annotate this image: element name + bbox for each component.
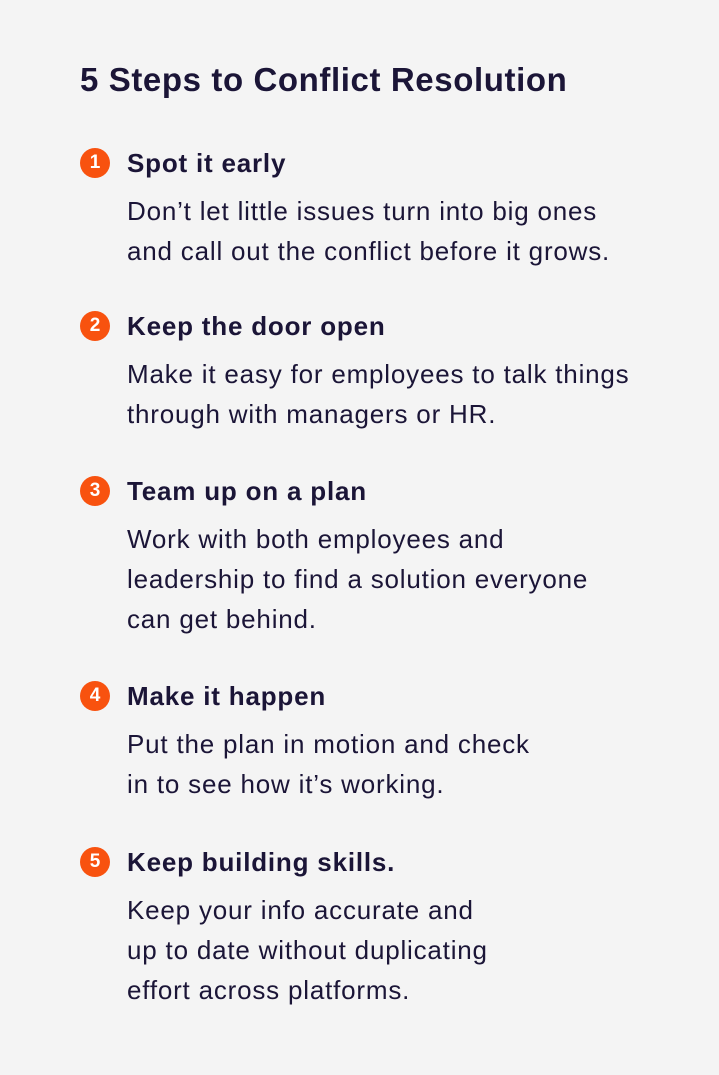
text 1: Don’t let little issues turn into big ones bbox=[127, 196, 597, 226]
icon: number 4: 4 bbox=[90, 685, 100, 706]
text 2: through with managers or HR. bbox=[127, 399, 496, 429]
heading 3: Team up on a plan bbox=[127, 476, 367, 506]
heading 4: Make it happen bbox=[127, 681, 326, 711]
icon: number 5 bbox=[80, 847, 110, 877]
step 3 bbox=[80, 476, 588, 634]
icon: number 3 bbox=[80, 476, 110, 506]
heading 1: Spot it early bbox=[127, 148, 286, 178]
step 2 bbox=[80, 311, 629, 429]
text 5: effort across platforms. bbox=[127, 975, 410, 1005]
step 4 bbox=[80, 681, 530, 799]
title: 5 Steps to Conflict Resolution bbox=[80, 61, 567, 98]
step 1 bbox=[80, 148, 610, 266]
icon: number 1: 1 bbox=[90, 152, 100, 173]
text 3: can get behind. bbox=[127, 604, 317, 634]
icon: number 2: 2 bbox=[90, 315, 100, 336]
text 5: Keep your info accurate and bbox=[127, 895, 474, 925]
text 4: Put the plan in motion and check bbox=[127, 729, 530, 759]
text 3: Work with both employees and bbox=[127, 524, 504, 554]
step 5 bbox=[80, 847, 488, 1005]
text 5: up to date without duplicating bbox=[127, 935, 488, 965]
text 1: and call out the conflict before it grows. bbox=[127, 236, 610, 266]
text 3: leadership to find a solution everyone bbox=[127, 564, 588, 594]
heading 2: Keep the door open bbox=[127, 311, 386, 341]
text 3 bbox=[127, 524, 588, 634]
icon: number 2 bbox=[80, 311, 110, 341]
icon: number 5: 5 bbox=[90, 851, 100, 872]
text 4: in to see how it’s working. bbox=[127, 769, 444, 799]
text 2: Make it easy for employees to talk things bbox=[127, 359, 629, 389]
text 1 bbox=[127, 196, 610, 266]
text 4 bbox=[127, 729, 530, 799]
text 2 bbox=[127, 359, 629, 429]
icon: number 1 bbox=[80, 148, 110, 178]
icon: number 4 bbox=[80, 681, 110, 711]
heading 5: Keep building skills. bbox=[127, 847, 395, 877]
icon: number 3: 3 bbox=[90, 480, 100, 501]
text 5 bbox=[127, 895, 488, 1005]
